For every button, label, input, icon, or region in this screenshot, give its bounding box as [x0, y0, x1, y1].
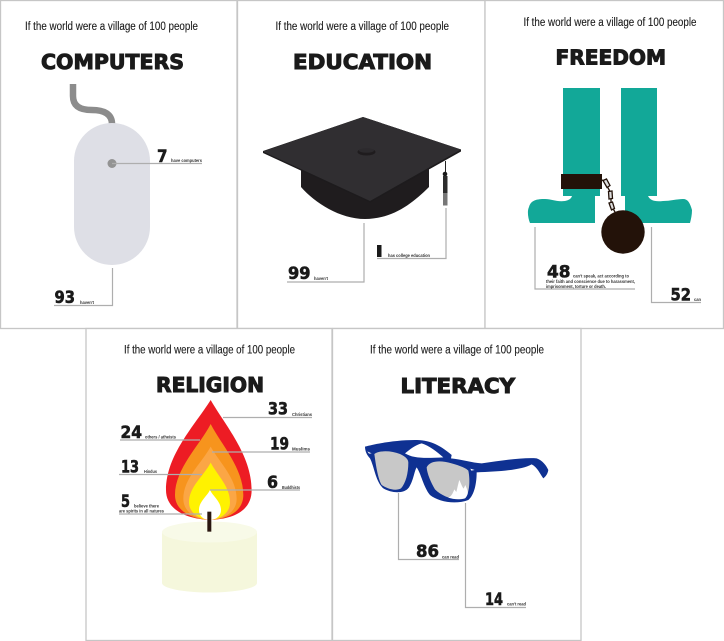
callout: 93 haven't: 93: [54, 288, 75, 308]
subtitle: education: If the world were a village of 100 people: [276, 21, 449, 33]
panel: computers: [0, 0, 237, 328]
title: computers: COMPUTERS: [41, 50, 184, 74]
callout: 6 Buddhists: [210, 473, 300, 493]
callout: 48 can't speak: imprisonment, torture or death.: [546, 284, 606, 289]
panel: literacy: [332, 328, 581, 640]
icon: computer mouse: [73, 84, 150, 265]
callout: 7 have computers: [112, 147, 203, 167]
callout: 24 others / atheists: others / atheists: [145, 434, 177, 440]
callout: 24 others / atheists: 24: [120, 423, 142, 443]
callout: 52 can: 52: [670, 286, 691, 306]
callout: 48 can't speak: 48: [547, 262, 570, 282]
panel: freedom: [485, 0, 724, 328]
callout: 93 haven't: haven't: [80, 300, 94, 305]
callout: 52 can: [652, 227, 701, 306]
subtitle: religion: If the world were a village of 100 people: [124, 344, 295, 356]
callout: 86 can read: 86: [416, 542, 439, 562]
callout: 1 has college education: [377, 208, 446, 258]
title: literacy: LITERACY: [400, 374, 516, 398]
title: education: EDUCATION: [293, 50, 432, 74]
callout: 7 have computers: 7: [157, 147, 168, 167]
callout: 14 can't read: [466, 503, 526, 610]
callout: 5 believe there are spirits in all natures: are spirits in all natures: [119, 508, 165, 514]
callout: 99 haven't: haven't: [314, 276, 328, 281]
callout: 33 Christians: Christians: [292, 412, 313, 417]
callout: 6 Buddhists: Buddhists: [282, 485, 300, 490]
callout: 19 Muslims: [212, 434, 311, 454]
callout: 24 others / atheists: [120, 423, 200, 443]
subtitle: literacy: If the world were a village of 100 people: [370, 344, 544, 356]
panel: education: [238, 0, 485, 328]
icon: graduation cap: [263, 117, 461, 219]
callout: 13 Hindus: [119, 458, 202, 478]
callout: 93 haven't: [54, 268, 112, 308]
callout: 5 believe there are spirits in all natures: 5: [121, 492, 130, 512]
callout: 48 can't speak: can't speak, act according to: [573, 274, 629, 278]
callout: 5 believe there are spirits in all natures: believe there: [134, 504, 160, 508]
icon: candle: [162, 522, 257, 592]
icon: blue glasses: [365, 440, 548, 502]
callout: 14 can't read: 14: [485, 590, 503, 610]
callout: 19 Muslims: Muslims: [292, 446, 311, 452]
callout: 5 believe there are spirits in all natures: [119, 492, 202, 514]
callout: 6 Buddhists: 6: [267, 473, 278, 493]
callout: 86 can read: can read: [442, 554, 459, 560]
callout: 86 can read: [398, 493, 459, 562]
callout: 13 Hindus: Hindus: [144, 469, 157, 474]
title: freedom: FREEDOM: [556, 46, 666, 70]
title: religion: RELIGION: [156, 373, 264, 397]
callout: 99 haven't: [287, 223, 364, 284]
callout: 1 has college education: has college education: [388, 253, 430, 258]
callout: 19 Muslims: 19: [270, 434, 289, 454]
callout: 13 Hindus: 13: [121, 458, 139, 478]
callout: 14 can't read: can't read: [507, 602, 526, 606]
callout: 33 Christians: [223, 400, 313, 420]
panel: religion: [86, 328, 332, 640]
callout: 48 can't speak: their faith and conscience due to harassment,: [546, 279, 635, 284]
callout: 48 can't speak: [535, 227, 635, 289]
icon: legs with ball and chain: [528, 88, 692, 254]
callout: 7 have computers: have computers: [171, 158, 203, 163]
subtitle: computers: If the world were a village of 100 people: [25, 21, 198, 33]
callout: 33 Christians: 33: [268, 400, 288, 420]
callout: 52 can: can: [694, 297, 701, 302]
callout: 99 haven't: 99: [288, 264, 310, 284]
icon: flame: [166, 400, 252, 532]
subtitle: freedom: If the world were a village of 100 people: [524, 17, 696, 29]
